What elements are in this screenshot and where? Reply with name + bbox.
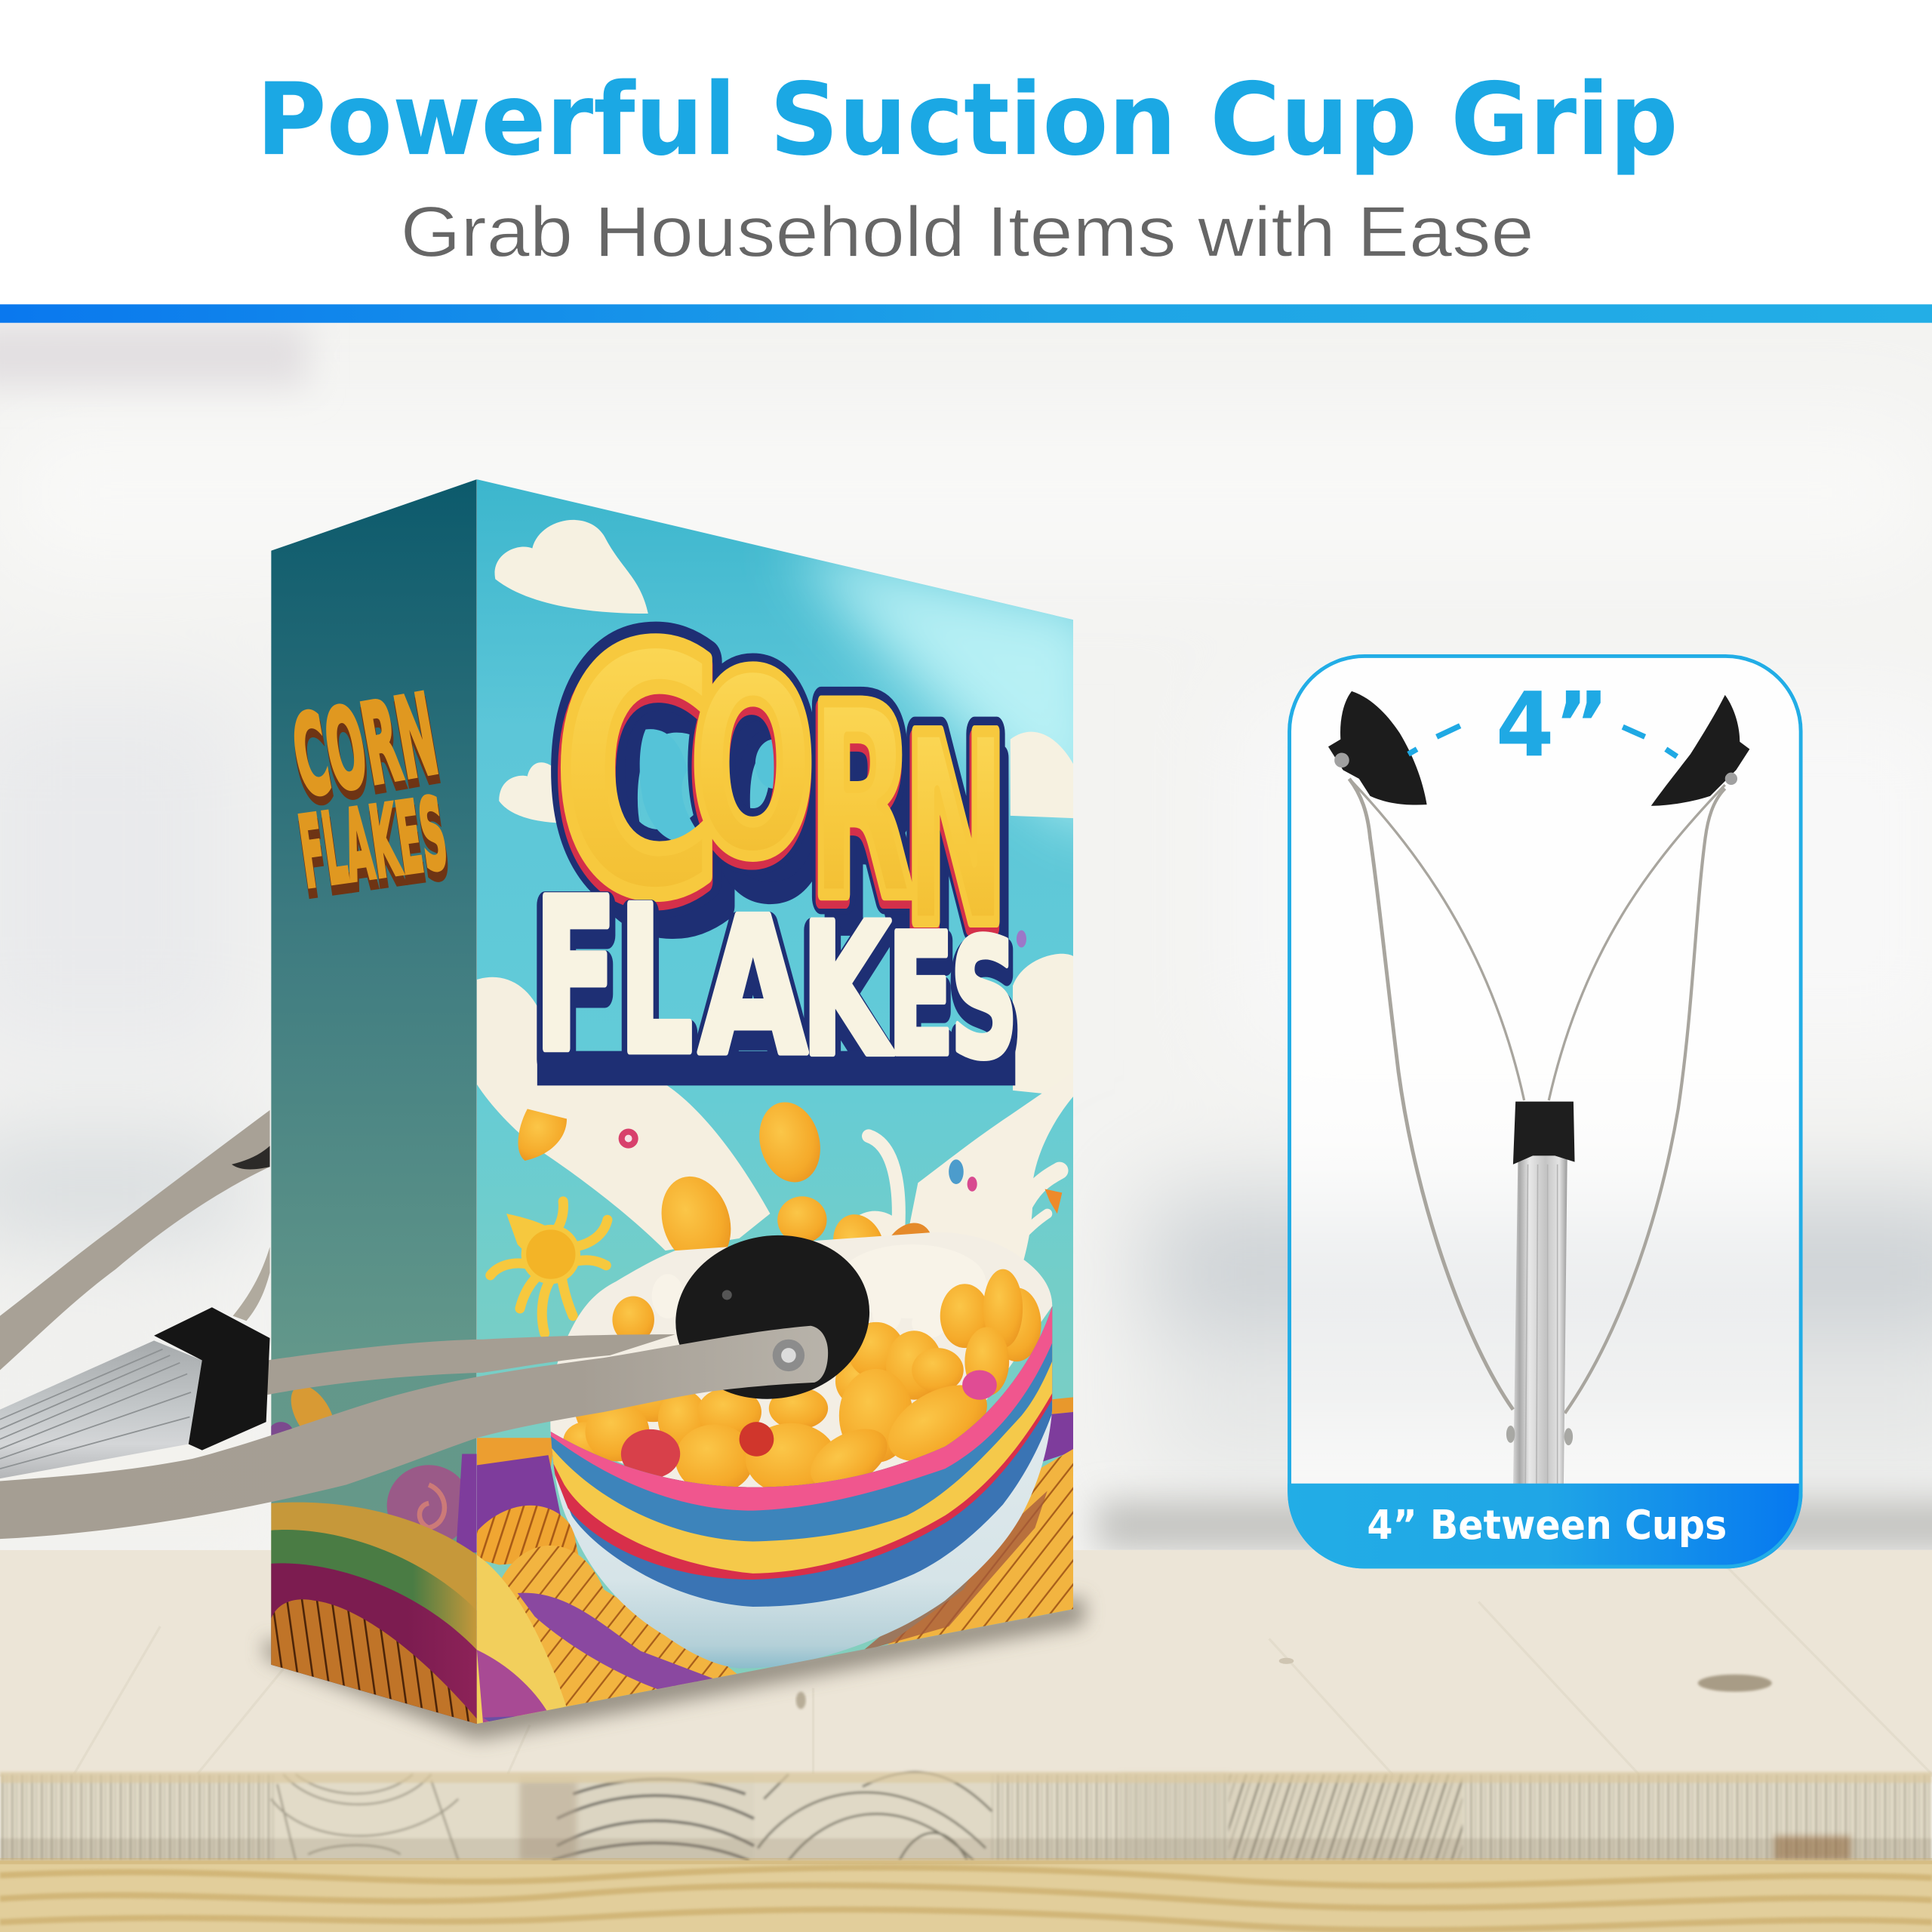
measurement label: 4” <box>1496 673 1609 777</box>
grabber thin upper arm <box>267 1334 675 1395</box>
corn logo letters: R <box>808 649 915 958</box>
tiny decorative icons <box>491 931 1062 1389</box>
rivets <box>1506 1426 1573 1445</box>
arm screw <box>773 1340 804 1371</box>
falling flakes <box>518 1095 943 1295</box>
wooden table top <box>0 1550 1932 1777</box>
black cap <box>1513 1102 1575 1164</box>
corn logo red edge: C <box>553 584 721 975</box>
bottom scenery <box>462 1397 1073 1724</box>
dashed distance arc right <box>1623 727 1677 756</box>
cereal box <box>269 479 1109 1725</box>
inner left wire <box>1352 781 1524 1100</box>
title: Powerful Suction Cup Grip <box>257 62 1678 178</box>
corn logo navy outline <box>555 580 1008 986</box>
cereal bowl <box>542 1232 1072 1675</box>
flakes logo letters: L <box>619 863 693 1099</box>
milk ribbon <box>477 977 770 1251</box>
panel background <box>1287 654 1803 1568</box>
flakes logo letters: A <box>699 878 808 1097</box>
grabber rear arm behind box <box>0 1110 270 1371</box>
corn logo navy extrusion: N <box>909 706 1014 1008</box>
flakes logo navy shadow: S <box>950 913 1018 1107</box>
measurement panel <box>1287 654 1803 1570</box>
flakes logo letters: F <box>534 854 617 1098</box>
corn logo red edge: O <box>689 627 814 918</box>
sky hole in letter O <box>755 740 792 789</box>
grabber suction cup on box <box>663 1220 882 1414</box>
inner right wire <box>1549 785 1725 1100</box>
milk in bowl <box>652 1244 988 1338</box>
flakes logo navy shadow: L <box>619 873 693 1111</box>
grabber head photo <box>1328 691 1749 1491</box>
flakes logo navy shadow <box>534 864 1018 1111</box>
flakes logo letters <box>534 854 1018 1099</box>
table front yellow wood <box>0 1858 1932 1932</box>
corn logo letters <box>555 578 1008 984</box>
corn logo letters: O <box>690 621 816 912</box>
corn logo letters: C <box>555 578 721 969</box>
red berry <box>740 1422 774 1457</box>
flakes logo letters: E <box>888 898 955 1093</box>
dashed distance arc left <box>1408 726 1460 754</box>
box side logo: CORN <box>285 671 446 823</box>
strawberry <box>621 1429 680 1478</box>
flakes logo base block <box>537 1051 1015 1085</box>
box left side panel <box>269 479 477 1725</box>
corn logo navy outline: O <box>690 623 816 915</box>
grabber aluminium shaft <box>0 1340 202 1478</box>
milk splash <box>859 1093 1073 1260</box>
flakes logo letters: K <box>801 884 894 1097</box>
grabber black end cap <box>154 1307 270 1451</box>
caption banner <box>1287 1484 1803 1570</box>
outer right wire <box>1564 789 1725 1414</box>
box front panel <box>462 479 1109 1724</box>
box shadow on table <box>265 1597 1084 1740</box>
cereal flakes <box>563 1269 1041 1501</box>
corn logo red edge: N <box>902 687 1007 990</box>
box side logo shadow: CORN <box>285 678 447 829</box>
right suction cup <box>1651 695 1749 806</box>
flakes logo navy shadow: E <box>888 908 955 1105</box>
corn logo navy outline: C <box>555 580 721 971</box>
corn logo navy extrusion: O <box>707 661 833 948</box>
flakes logo navy shadow: A <box>699 887 808 1109</box>
pink candy <box>962 1371 997 1400</box>
caption text: 4” Between Cups <box>1367 1501 1727 1549</box>
corn logo letters: N <box>903 680 1008 984</box>
table edge wood grain <box>0 1772 1932 1860</box>
gradient divider bar <box>0 304 1932 323</box>
corn logo navy extrusion <box>572 611 1014 1008</box>
blurred room background <box>0 323 1932 1555</box>
box side logo: FLAKES <box>293 777 454 911</box>
flakes logo letters: S <box>950 903 1018 1095</box>
corn logo red edge <box>553 584 1007 990</box>
corn logo navy extrusion: R <box>818 684 924 986</box>
sun <box>491 1201 608 1334</box>
shade on rear arm <box>232 1146 270 1169</box>
box side logo <box>285 671 454 911</box>
corn logo navy outline: N <box>903 683 1008 986</box>
left suction cup <box>1328 691 1427 805</box>
sky hole in letter C <box>640 729 703 842</box>
box side logo shadow <box>285 678 454 920</box>
outer left wire <box>1349 779 1513 1410</box>
grabber thin rear strip <box>233 1247 270 1321</box>
bowl interior rim <box>550 1232 1052 1509</box>
corn logo navy outline: R <box>808 652 915 961</box>
box side logo shadow: FLAKES <box>294 786 454 920</box>
corn logo navy extrusion: C <box>572 611 739 998</box>
aluminium rod <box>1513 1155 1567 1491</box>
panel outline <box>1290 656 1801 1567</box>
flakes logo navy shadow: F <box>534 864 617 1110</box>
corn logo red edge: R <box>807 656 913 964</box>
sky background <box>477 479 1073 1724</box>
bowl body with stripes <box>542 1232 1072 1675</box>
grabber main arm <box>0 1326 828 1539</box>
flakes logo navy shadow: K <box>801 894 894 1109</box>
clouds <box>495 520 1073 1097</box>
subtitle: Grab Household Items with Ease <box>401 192 1534 272</box>
